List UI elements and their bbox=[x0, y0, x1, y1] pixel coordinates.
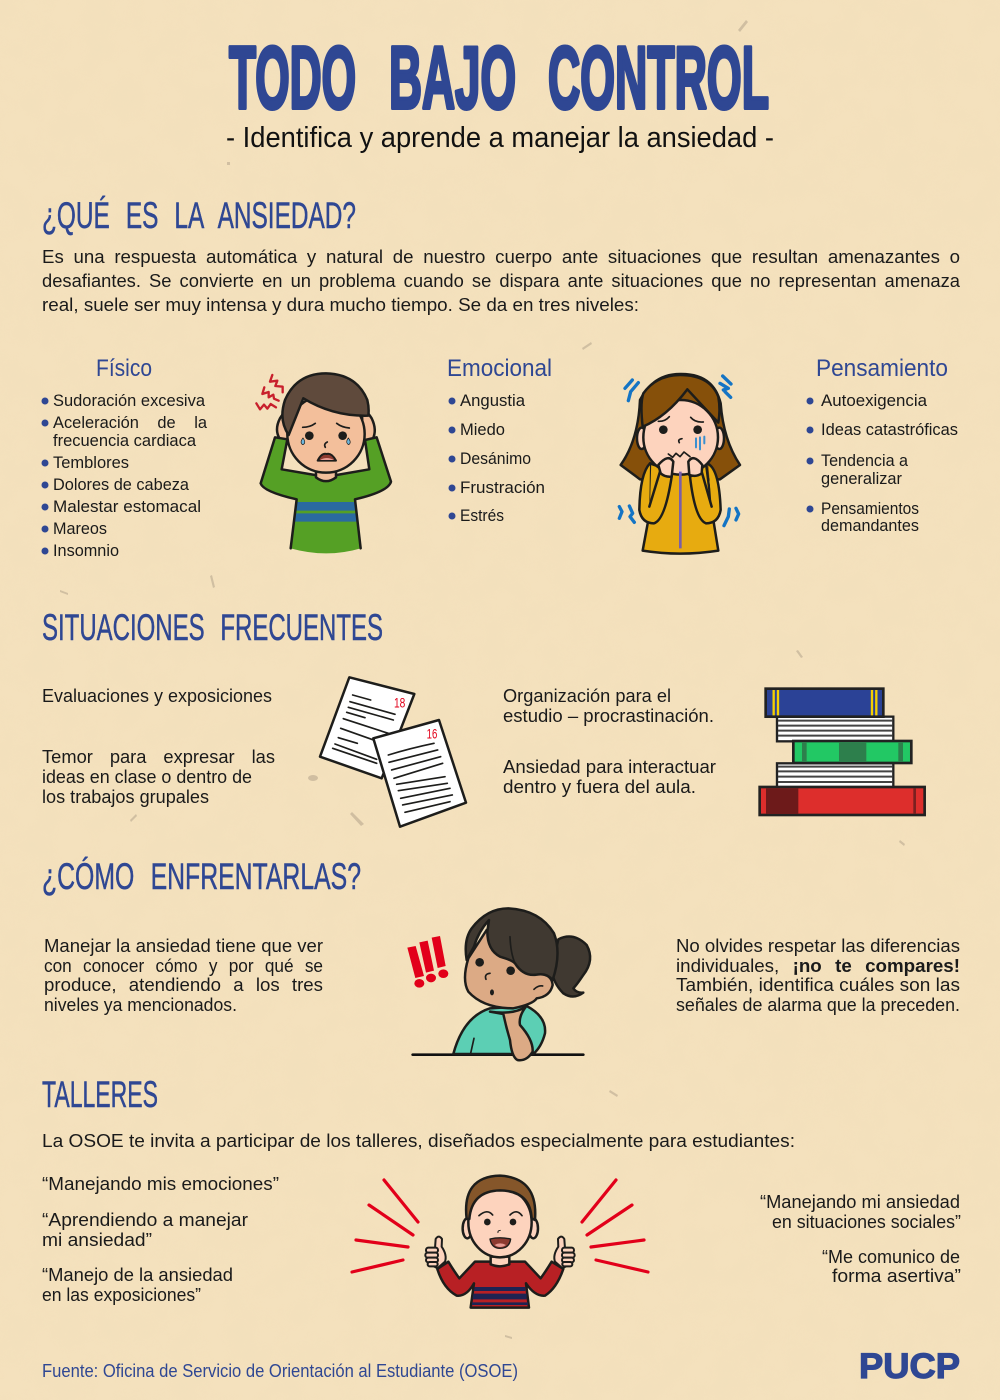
list: síntomas físicos: frecuencia cardiaca bbox=[53, 432, 197, 450]
list: síntomas de pensamiento: demandantes bbox=[821, 517, 919, 535]
title bbox=[229, 28, 769, 127]
list: talleres derecha: en situaciones sociales” bbox=[772, 1211, 961, 1232]
list: síntomas de pensamiento bbox=[806, 392, 958, 535]
list: síntomas emocionales: Frustración bbox=[460, 479, 545, 497]
title: CONTROL bbox=[548, 28, 769, 127]
list: talleres derecha bbox=[760, 1191, 961, 1286]
list: talleres derecha: “Me comunico de bbox=[822, 1246, 960, 1267]
heading: físico: Físico bbox=[96, 355, 152, 382]
text block: manejar la ansiedad: con conocer cómo y por qué se bbox=[44, 955, 323, 976]
list: síntomas emocionales: Angustia bbox=[460, 392, 526, 410]
text block: manejar la ansiedad: niveles ya mencionados. bbox=[44, 994, 237, 1015]
text block: respetar diferencias bbox=[676, 935, 960, 1015]
text block: temor: Temor para expresar las bbox=[42, 746, 275, 767]
list: síntomas físicos: Dolores de cabeza bbox=[53, 476, 190, 494]
list: talleres derecha: “Manejando mi ansiedad bbox=[760, 1191, 960, 1212]
list: síntomas físicos: Aceleración de la bbox=[53, 414, 208, 432]
heading: situaciones frecuentes: SITUACIONES FRECUENTES bbox=[42, 607, 383, 648]
heading: talleres: TALLERES bbox=[42, 1074, 158, 1115]
text block: respetar diferencias: individuales, ¡no te compares! bbox=[676, 955, 960, 976]
subtitle: - Identifica y aprende a manejar la ansiedad - bbox=[226, 122, 774, 154]
list: talleres izquierda: en las exposiciones” bbox=[42, 1284, 201, 1305]
heading: cómo enfrentarlas: ¿CÓMO ENFRENTARLAS? bbox=[42, 856, 361, 897]
list: síntomas físicos: Temblores bbox=[53, 454, 129, 472]
text block: respetar diferencias: señales de alarma que la preceden. bbox=[676, 994, 960, 1015]
icon: right thumbs up bbox=[554, 1237, 575, 1268]
icon: happy boy thumbs up bbox=[352, 1176, 648, 1308]
icon: graded papers: 16 bbox=[427, 726, 437, 742]
heading: pensamiento: Pensamiento bbox=[816, 355, 948, 382]
list: síntomas de pensamiento: Tendencia a bbox=[821, 452, 909, 470]
text block: definition bbox=[42, 246, 961, 315]
text block: definition: desafiantes. Se convierte en un problema cuando se dispara ante situaciones que no representan amenaza bbox=[42, 270, 961, 291]
text block: manejar la ansiedad: produce, atendiendo a los tres bbox=[44, 974, 323, 995]
list: síntomas físicos: Sudoración excesiva bbox=[53, 392, 206, 410]
list: talleres derecha: forma asertiva” bbox=[832, 1265, 961, 1286]
text block: respetar diferencias: No olvides respetar las diferencias bbox=[676, 935, 960, 956]
text block: manejar la ansiedad: Manejar la ansiedad tiene que ver bbox=[44, 935, 323, 956]
list: síntomas de pensamiento: Pensamientos bbox=[821, 500, 919, 518]
text block: evaluaciones: Evaluaciones y exposiciones bbox=[42, 685, 272, 706]
list: síntomas emocionales: Desánimo bbox=[460, 450, 531, 468]
list: talleres izquierda: mi ansiedad” bbox=[42, 1229, 152, 1250]
text block: manejar la ansiedad bbox=[44, 935, 323, 1015]
icon: anxious girl bbox=[619, 374, 740, 554]
list: síntomas de pensamiento: Autoexigencia bbox=[821, 392, 928, 410]
list: síntomas emocionales: Estrés bbox=[460, 507, 504, 525]
icon: stack of books bbox=[760, 689, 925, 815]
icon: stressed boy bbox=[256, 373, 391, 553]
text block: temor: ideas en clase o dentro de bbox=[42, 766, 252, 787]
list: talleres izquierda bbox=[42, 1173, 279, 1305]
icon: graded papers bbox=[320, 677, 466, 827]
panel: pensamiento bbox=[806, 355, 958, 535]
text block: invitación: La OSOE te invita a participar de los talleres, diseñados especialmente para estudiantes: bbox=[42, 1130, 795, 1151]
list: talleres izquierda: “Manejando mis emociones” bbox=[42, 1173, 279, 1194]
icon: left thumbs up bbox=[425, 1237, 446, 1268]
icon: red rays bbox=[352, 1180, 648, 1272]
list: síntomas de pensamiento: Ideas catastróficas bbox=[821, 421, 958, 439]
list: talleres izquierda: “Manejo de la ansiedad bbox=[42, 1264, 233, 1285]
text block: interactuar: dentro y fuera del aula. bbox=[503, 776, 696, 797]
text block: temor bbox=[42, 746, 275, 807]
heading: qué es la ansiedad: ¿QUÉ ES LA ANSIEDAD? bbox=[42, 195, 356, 236]
text block: respetar diferencias: También, identifica cuáles son las bbox=[676, 974, 960, 995]
list: talleres izquierda: “Aprendiendo a manejar bbox=[42, 1209, 248, 1230]
panel: emocional bbox=[447, 355, 552, 525]
text block: interactuar: Ansiedad para interactuar bbox=[503, 756, 716, 777]
text block: organización: estudio – procrastinación. bbox=[503, 705, 714, 726]
list: síntomas físicos: Malestar estomacal bbox=[53, 498, 201, 516]
text block: temor: los trabajos grupales bbox=[42, 786, 209, 807]
list: síntomas de pensamiento: generalizar bbox=[821, 470, 902, 488]
title: BAJO bbox=[389, 28, 516, 127]
title: TODO bbox=[229, 28, 356, 127]
icon: graded papers: 18 bbox=[394, 695, 405, 711]
heading: emocional: Emocional bbox=[447, 355, 552, 382]
text block: definition: real, suele ser muy intensa y dura mucho tiempo. Se da en tres niveles: bbox=[42, 294, 639, 315]
list: síntomas emocionales: Miedo bbox=[460, 421, 505, 439]
text block: organización bbox=[503, 685, 714, 726]
icon: thinking girl bbox=[407, 908, 590, 1060]
list: síntomas físicos: Insomnio bbox=[53, 542, 119, 560]
text block: definition: Es una respuesta automática y natural de nuestro cuerpo ante situaciones que resultan amenazantes o bbox=[42, 246, 960, 267]
list: síntomas físicos: Mareos bbox=[53, 520, 107, 538]
logo: PUCP: PUCP bbox=[859, 1347, 960, 1386]
text block: interactuar bbox=[503, 756, 716, 797]
text block: organización: Organización para el bbox=[503, 685, 671, 706]
source note: Fuente: Oficina de Servicio de Orientación al Estudiante (OSOE) bbox=[42, 1361, 518, 1381]
panel: físico bbox=[42, 355, 208, 560]
list: síntomas emocionales bbox=[448, 392, 545, 525]
list: síntomas físicos bbox=[42, 392, 208, 560]
icon: exclamation marks bbox=[407, 936, 448, 988]
